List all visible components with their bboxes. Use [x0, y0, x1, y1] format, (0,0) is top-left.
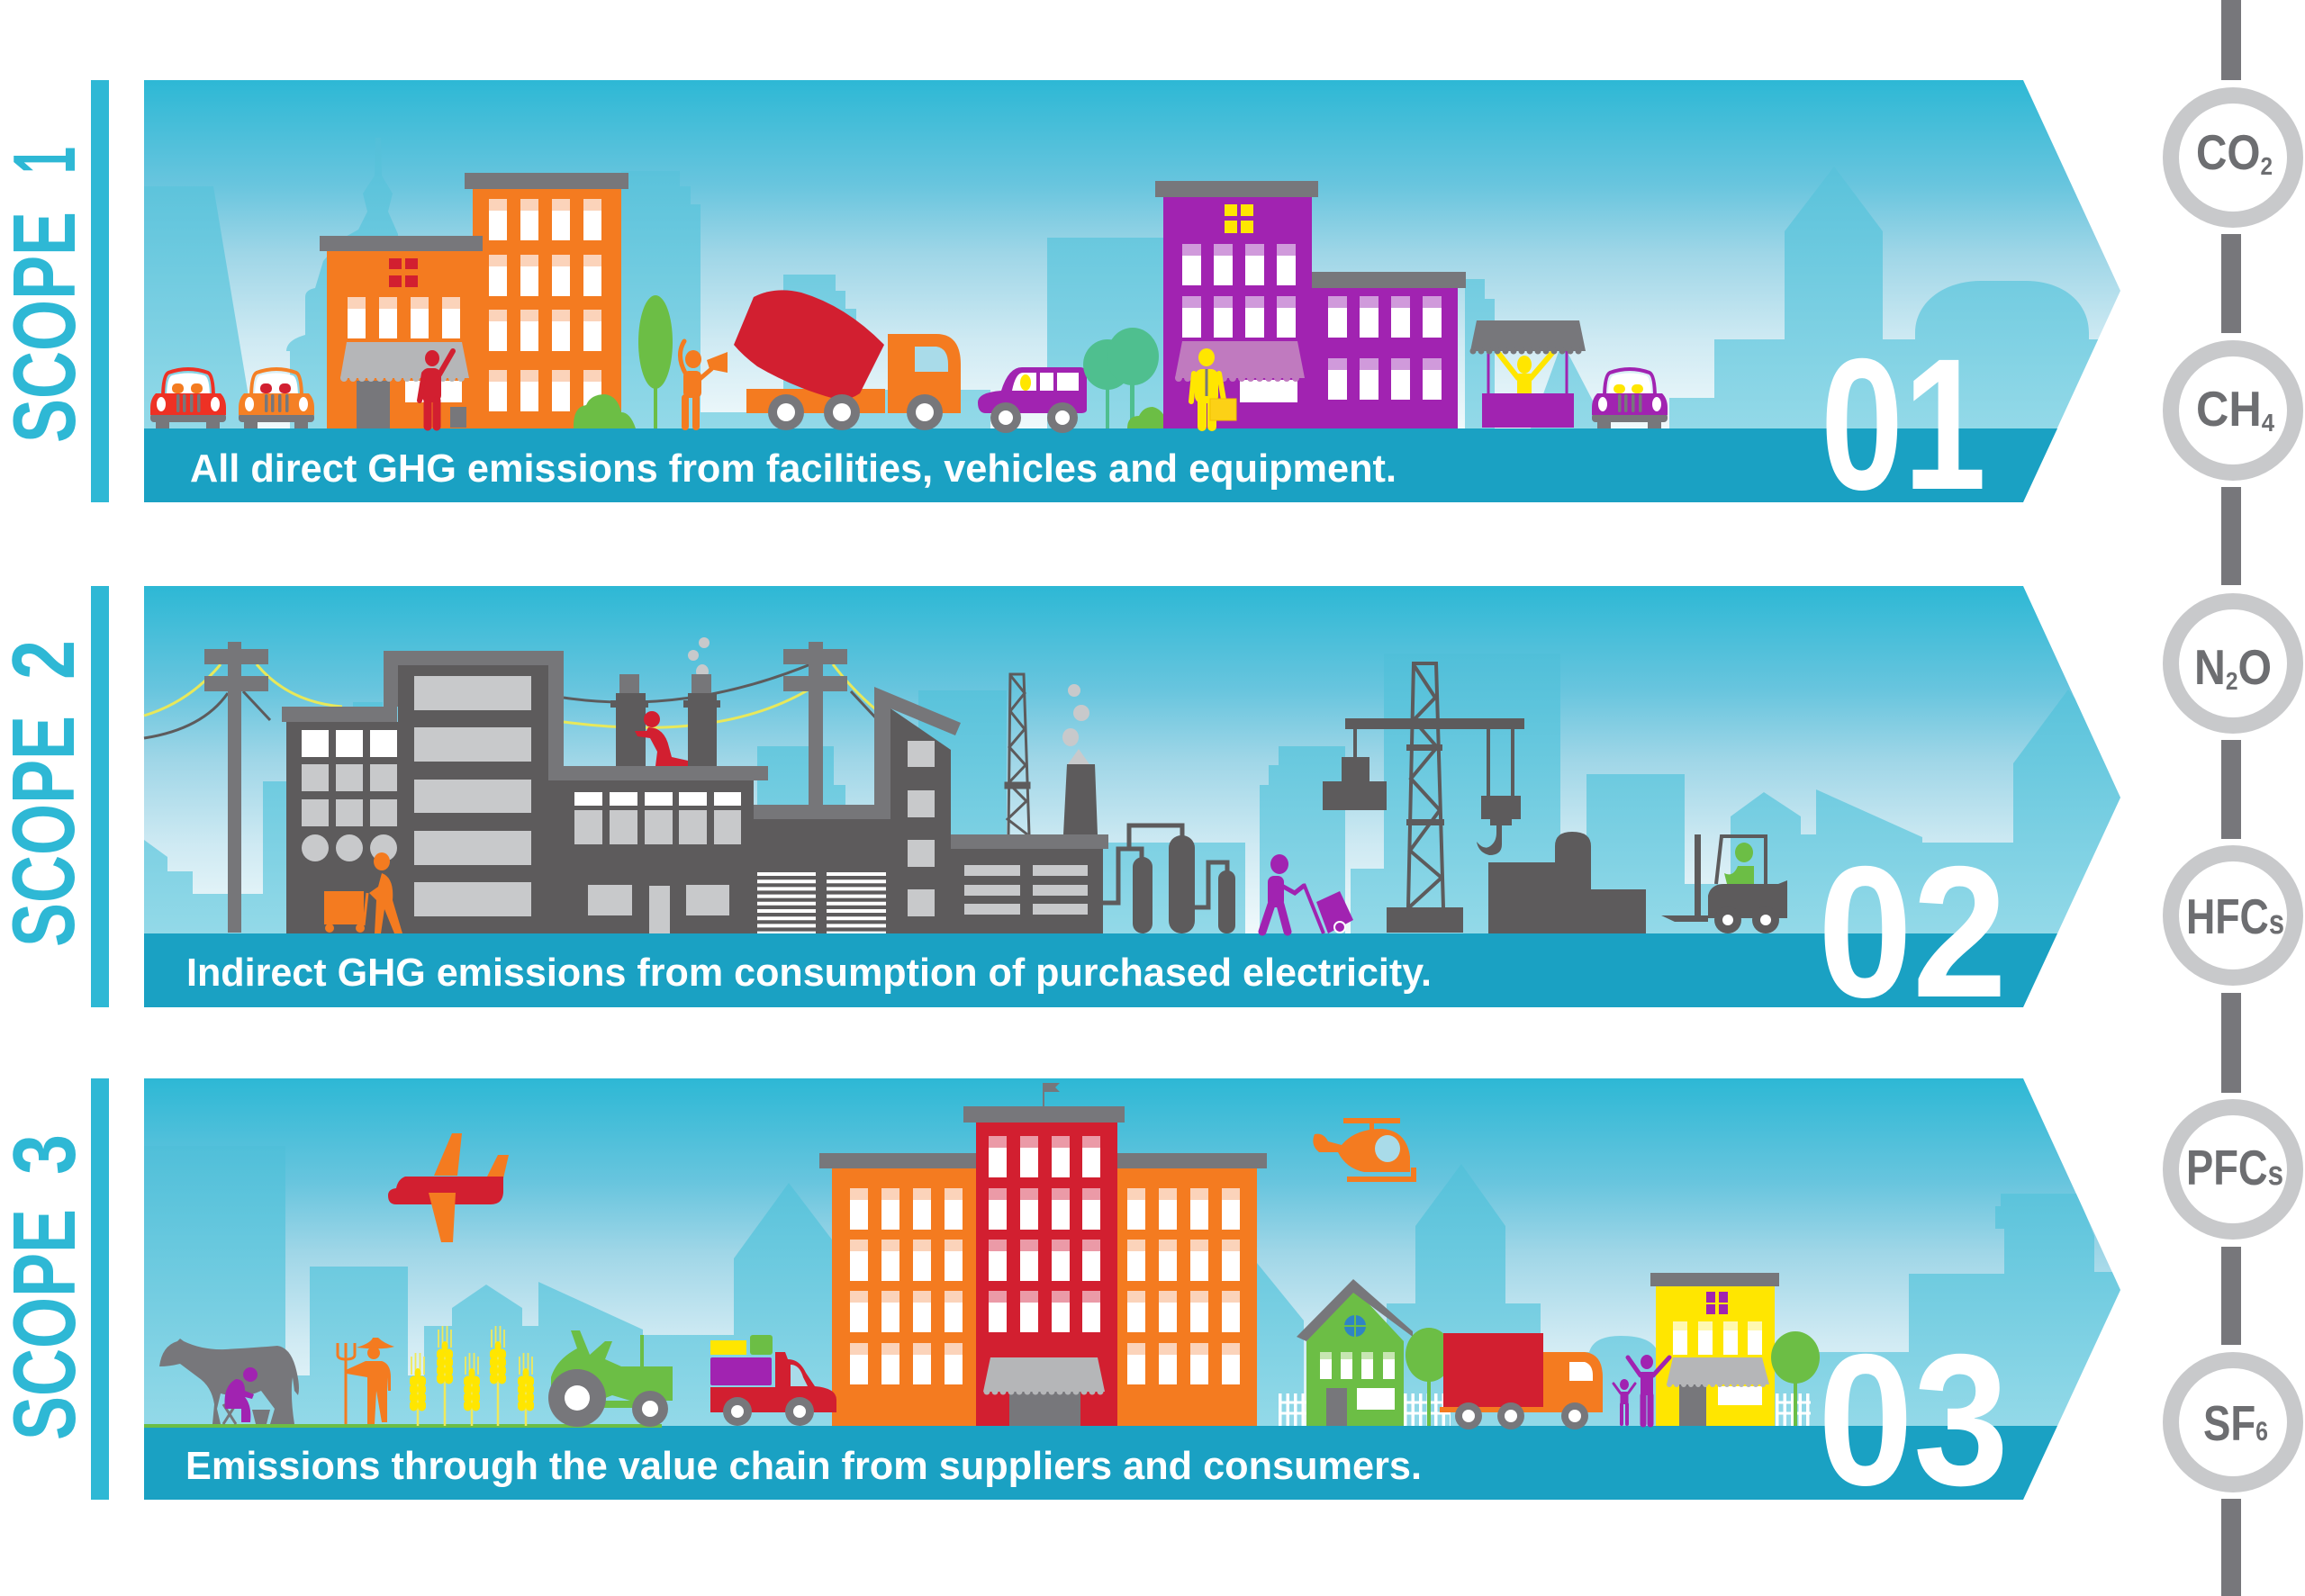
person cleaning awning — [420, 350, 466, 428]
factory building E with slanted roof — [874, 687, 961, 933]
background city skyline — [144, 176, 2098, 428]
red box truck — [1440, 1333, 1603, 1429]
factory building D with shutters — [754, 805, 891, 933]
gas: N2O — [2171, 601, 2295, 726]
gas: CO2: CO — [2196, 124, 2271, 180]
ground band — [144, 1426, 2057, 1500]
tree by the house — [1406, 1328, 1452, 1426]
passengers in red car — [172, 383, 203, 393]
panel background arrow — [144, 1078, 2120, 1500]
businessman with shopping bag — [1191, 348, 1236, 427]
factory building B — [384, 651, 564, 933]
caption: All direct GHG emissions from facilities, vehicles and equipment. — [190, 446, 1397, 491]
panel: scope 2 — [144, 586, 2161, 1037]
gas: SF6: SF6 — [2203, 1395, 2268, 1451]
factory chimneys with smoke — [610, 637, 720, 770]
wheat stalks — [411, 1326, 532, 1426]
greenhouse gases column — [2171, 0, 2295, 1596]
tree — [638, 295, 673, 428]
panel: scope 3 — [144, 1078, 2161, 1525]
scope 2 side label — [0, 586, 109, 1007]
gas: SF6 — [2171, 1360, 2295, 1484]
side bar — [91, 80, 109, 502]
passengers in orange car — [260, 383, 291, 393]
panel background arrow — [144, 80, 2120, 502]
purple front car — [1592, 369, 1668, 428]
red worker on roof — [635, 711, 688, 766]
scope 3 side label — [0, 1078, 109, 1500]
grass strip — [144, 1424, 662, 1428]
gas: CO2: 2 — [2260, 152, 2273, 180]
green tractor — [548, 1330, 673, 1427]
hotel left wing — [819, 1153, 976, 1426]
hotel right wing — [1117, 1153, 1267, 1426]
factory building F — [951, 834, 1108, 933]
ground band — [144, 428, 2057, 502]
gas: CO2 — [2171, 95, 2295, 220]
gas: PFCs: PFCs — [2186, 1140, 2283, 1195]
machine block — [1488, 832, 1646, 933]
hotel centre tower with flag — [963, 1083, 1125, 1426]
ground band — [144, 933, 2057, 1007]
connector spine — [2221, 0, 2241, 1596]
gas tanks and pipes — [1102, 825, 1235, 933]
orange building, tall — [465, 173, 628, 428]
orange worker with cart — [324, 852, 402, 933]
background city skyline — [144, 654, 2161, 933]
utility pole right — [783, 642, 847, 813]
panel background arrow — [144, 586, 2120, 1007]
caption: Indirect GHG emissions from consumption of purchased electricity. — [186, 951, 1432, 995]
market stall with vendor — [1470, 320, 1586, 428]
scope 1 side label — [0, 80, 109, 502]
purple side-view car — [978, 367, 1087, 433]
numeral 02: 02 — [1818, 828, 2007, 1037]
purple family waving — [1614, 1355, 1669, 1424]
gas: N2O: 2 — [2226, 667, 2237, 695]
gas: CH4 — [2171, 348, 2295, 473]
green house — [1297, 1279, 1413, 1426]
side bar — [91, 586, 109, 1007]
helicopter — [1313, 1118, 1414, 1179]
person with megaphone — [680, 341, 728, 427]
purple building, low — [1175, 272, 1466, 428]
gas: N2O: N — [2194, 639, 2230, 695]
background city skyline — [144, 1146, 2161, 1426]
panel: scope 1 — [144, 80, 2120, 529]
power lines — [144, 664, 878, 738]
side bar — [91, 1078, 109, 1500]
bush — [574, 394, 636, 428]
numeral 03: 03 — [1818, 1316, 2009, 1525]
yellow shop building — [1650, 1273, 1779, 1426]
numeral 01: 01 — [1821, 320, 1986, 529]
teal trees and bush — [1083, 328, 1187, 428]
concrete mixer truck — [734, 290, 961, 430]
gas: HFCs — [2171, 853, 2295, 978]
forklift — [1661, 834, 1787, 933]
gas: CH4: 4 — [2262, 409, 2274, 437]
lattice tower — [1006, 674, 1029, 834]
utility pole left — [204, 642, 268, 933]
cars: red and orange — [150, 369, 314, 428]
gas: PFCs — [2171, 1107, 2295, 1231]
gas: HFCs: HFCs — [2186, 888, 2284, 944]
factory building A — [282, 707, 401, 933]
orange building, front shop — [320, 236, 483, 428]
caption: Emissions through the value chain from suppliers and consumers. — [185, 1444, 1422, 1488]
purple worker with hand truck — [1262, 854, 1353, 933]
purple building, tall — [1155, 181, 1318, 428]
cow being milked — [159, 1339, 299, 1424]
gas: N2O: O — [2237, 639, 2272, 695]
airplane — [388, 1133, 509, 1242]
farmer with pitchfork — [338, 1338, 394, 1424]
crane — [1323, 663, 1524, 933]
white fences — [1279, 1402, 1811, 1413]
factory building C — [548, 766, 768, 933]
delivery truck with cargo — [710, 1335, 836, 1426]
smokestack with smoke — [1062, 684, 1098, 834]
tree by the shop — [1771, 1331, 1820, 1426]
gas: CH4: CH — [2196, 381, 2267, 437]
